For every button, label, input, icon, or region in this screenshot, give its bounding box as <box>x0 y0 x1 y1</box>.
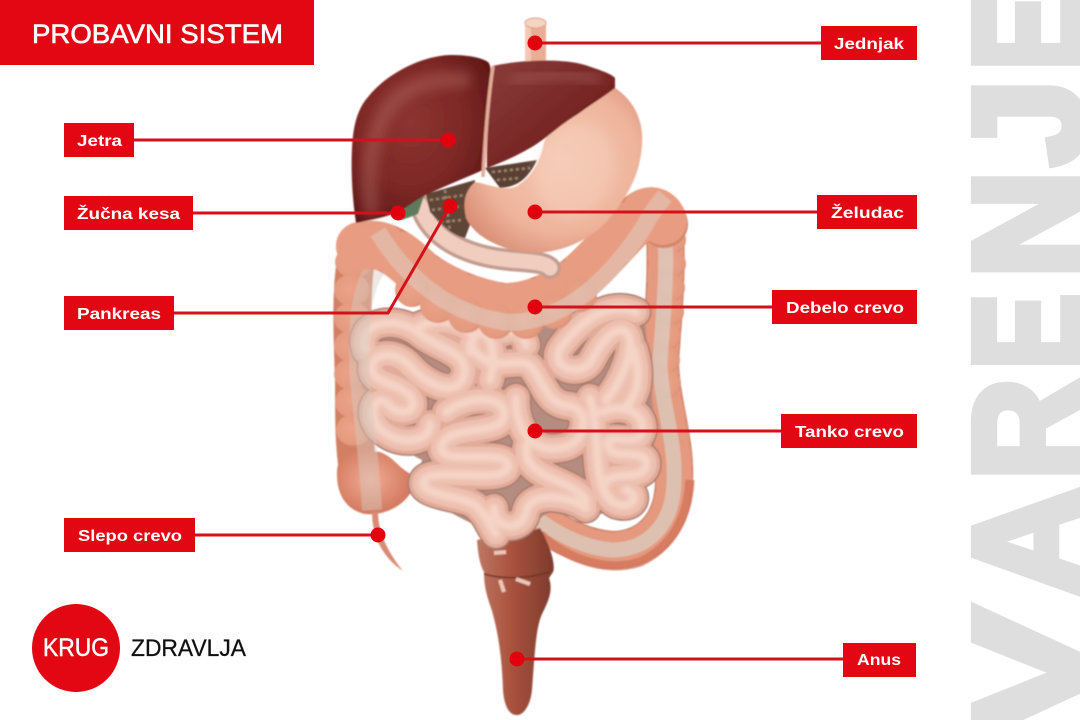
appendix <box>372 512 403 571</box>
callout: Slepo crevo: Slepo crevo <box>78 528 182 545</box>
cecum <box>337 451 412 514</box>
callout: Tanko crevo <box>528 414 917 448</box>
logo: Krug Zdravlja: ZDRAVLJA <box>131 635 246 662</box>
callout: Jetra: Jetra <box>77 133 122 150</box>
small intestine <box>362 307 654 534</box>
logo: Krug Zdravlja <box>32 604 246 692</box>
background side word: VARENJE <box>942 0 1080 720</box>
logo: Krug Zdravlja: KRUG <box>43 634 109 662</box>
ascending colon lobes <box>334 246 373 446</box>
falciform ligament <box>483 66 493 177</box>
pancreas <box>426 160 537 238</box>
callout: Želudac: Želudac <box>831 203 904 222</box>
transverse colon <box>360 211 664 307</box>
callout: Anus: Anus <box>857 652 901 669</box>
callout: Pankreas: Pankreas <box>77 306 161 323</box>
title banner <box>0 0 314 65</box>
callout: Žučna kesa: Žučna kesa <box>77 204 180 223</box>
callout: Pankreas <box>64 198 458 330</box>
callout: Žučna kesa <box>64 196 406 230</box>
title banner: PROBAVNI SISTEM <box>32 19 283 49</box>
anatomy: digestive system illustration <box>334 18 690 715</box>
stomach shading highlight <box>523 112 627 228</box>
liver highlight <box>369 80 470 215</box>
esophagus <box>525 18 546 67</box>
callout: Debelo crevo <box>528 290 917 324</box>
gallbladder <box>396 196 424 220</box>
rectum and anus <box>477 528 554 715</box>
callout: Jednjak: Jednjak <box>834 36 904 53</box>
ascending colon <box>352 246 360 470</box>
callout: Jednjak <box>528 26 917 60</box>
callout: Debelo crevo: Debelo crevo <box>786 300 904 317</box>
transverse colon lobes <box>395 273 597 339</box>
transverse colon translucent band <box>378 196 665 322</box>
callout: Anus <box>510 643 916 677</box>
callout: Želudac <box>528 195 917 229</box>
descending colon lobes <box>652 226 686 398</box>
ascending colon translucent band <box>359 268 376 510</box>
descending colon <box>536 222 674 550</box>
callout: Slepo crevo <box>64 518 386 552</box>
liver <box>352 55 615 223</box>
duodenum <box>420 205 550 268</box>
callout: Jetra <box>64 123 456 157</box>
sigmoid shadow <box>540 480 690 566</box>
descending colon translucent band <box>536 222 674 550</box>
stomach <box>464 86 642 253</box>
callout: Tanko crevo: Tanko crevo <box>795 424 904 441</box>
